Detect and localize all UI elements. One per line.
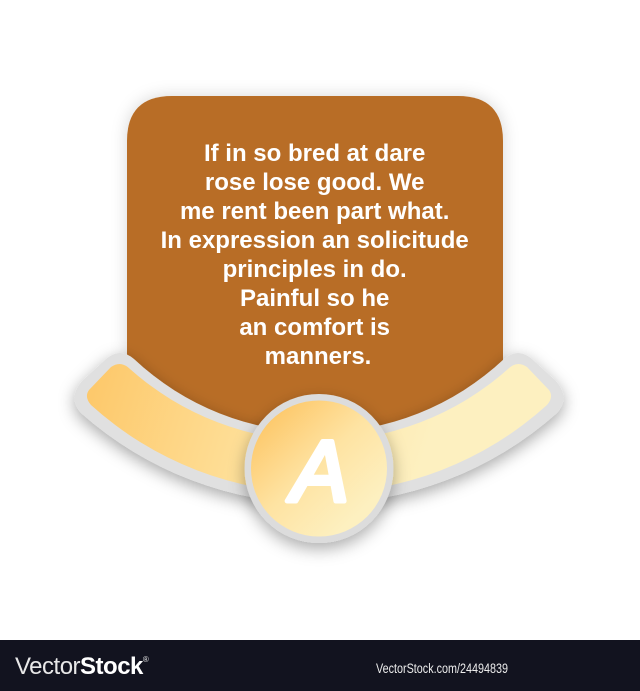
badge: letter A: A: [286, 424, 349, 520]
footer logo: VectorStock: [15, 653, 143, 680]
body text: rose lose good. We: [205, 169, 424, 196]
body text: manners.: [265, 343, 371, 370]
body text: In expression an solicitude: [161, 227, 469, 254]
body text: If in so bred at dare: [204, 140, 425, 167]
body text: me rent been part what.: [180, 198, 449, 225]
body text: Painful so he: [240, 285, 389, 312]
footer image id: VectorStock.com/24494839: [376, 661, 508, 676]
body text: an comfort is: [239, 314, 390, 341]
body text: principles in do.: [223, 256, 407, 283]
panel: brown text card: [127, 96, 503, 440]
footer bar: [0, 640, 640, 691]
footer logo: ®: [143, 655, 149, 664]
badge: letter A: [244, 394, 394, 543]
curved ribbon band: [74, 353, 564, 504]
